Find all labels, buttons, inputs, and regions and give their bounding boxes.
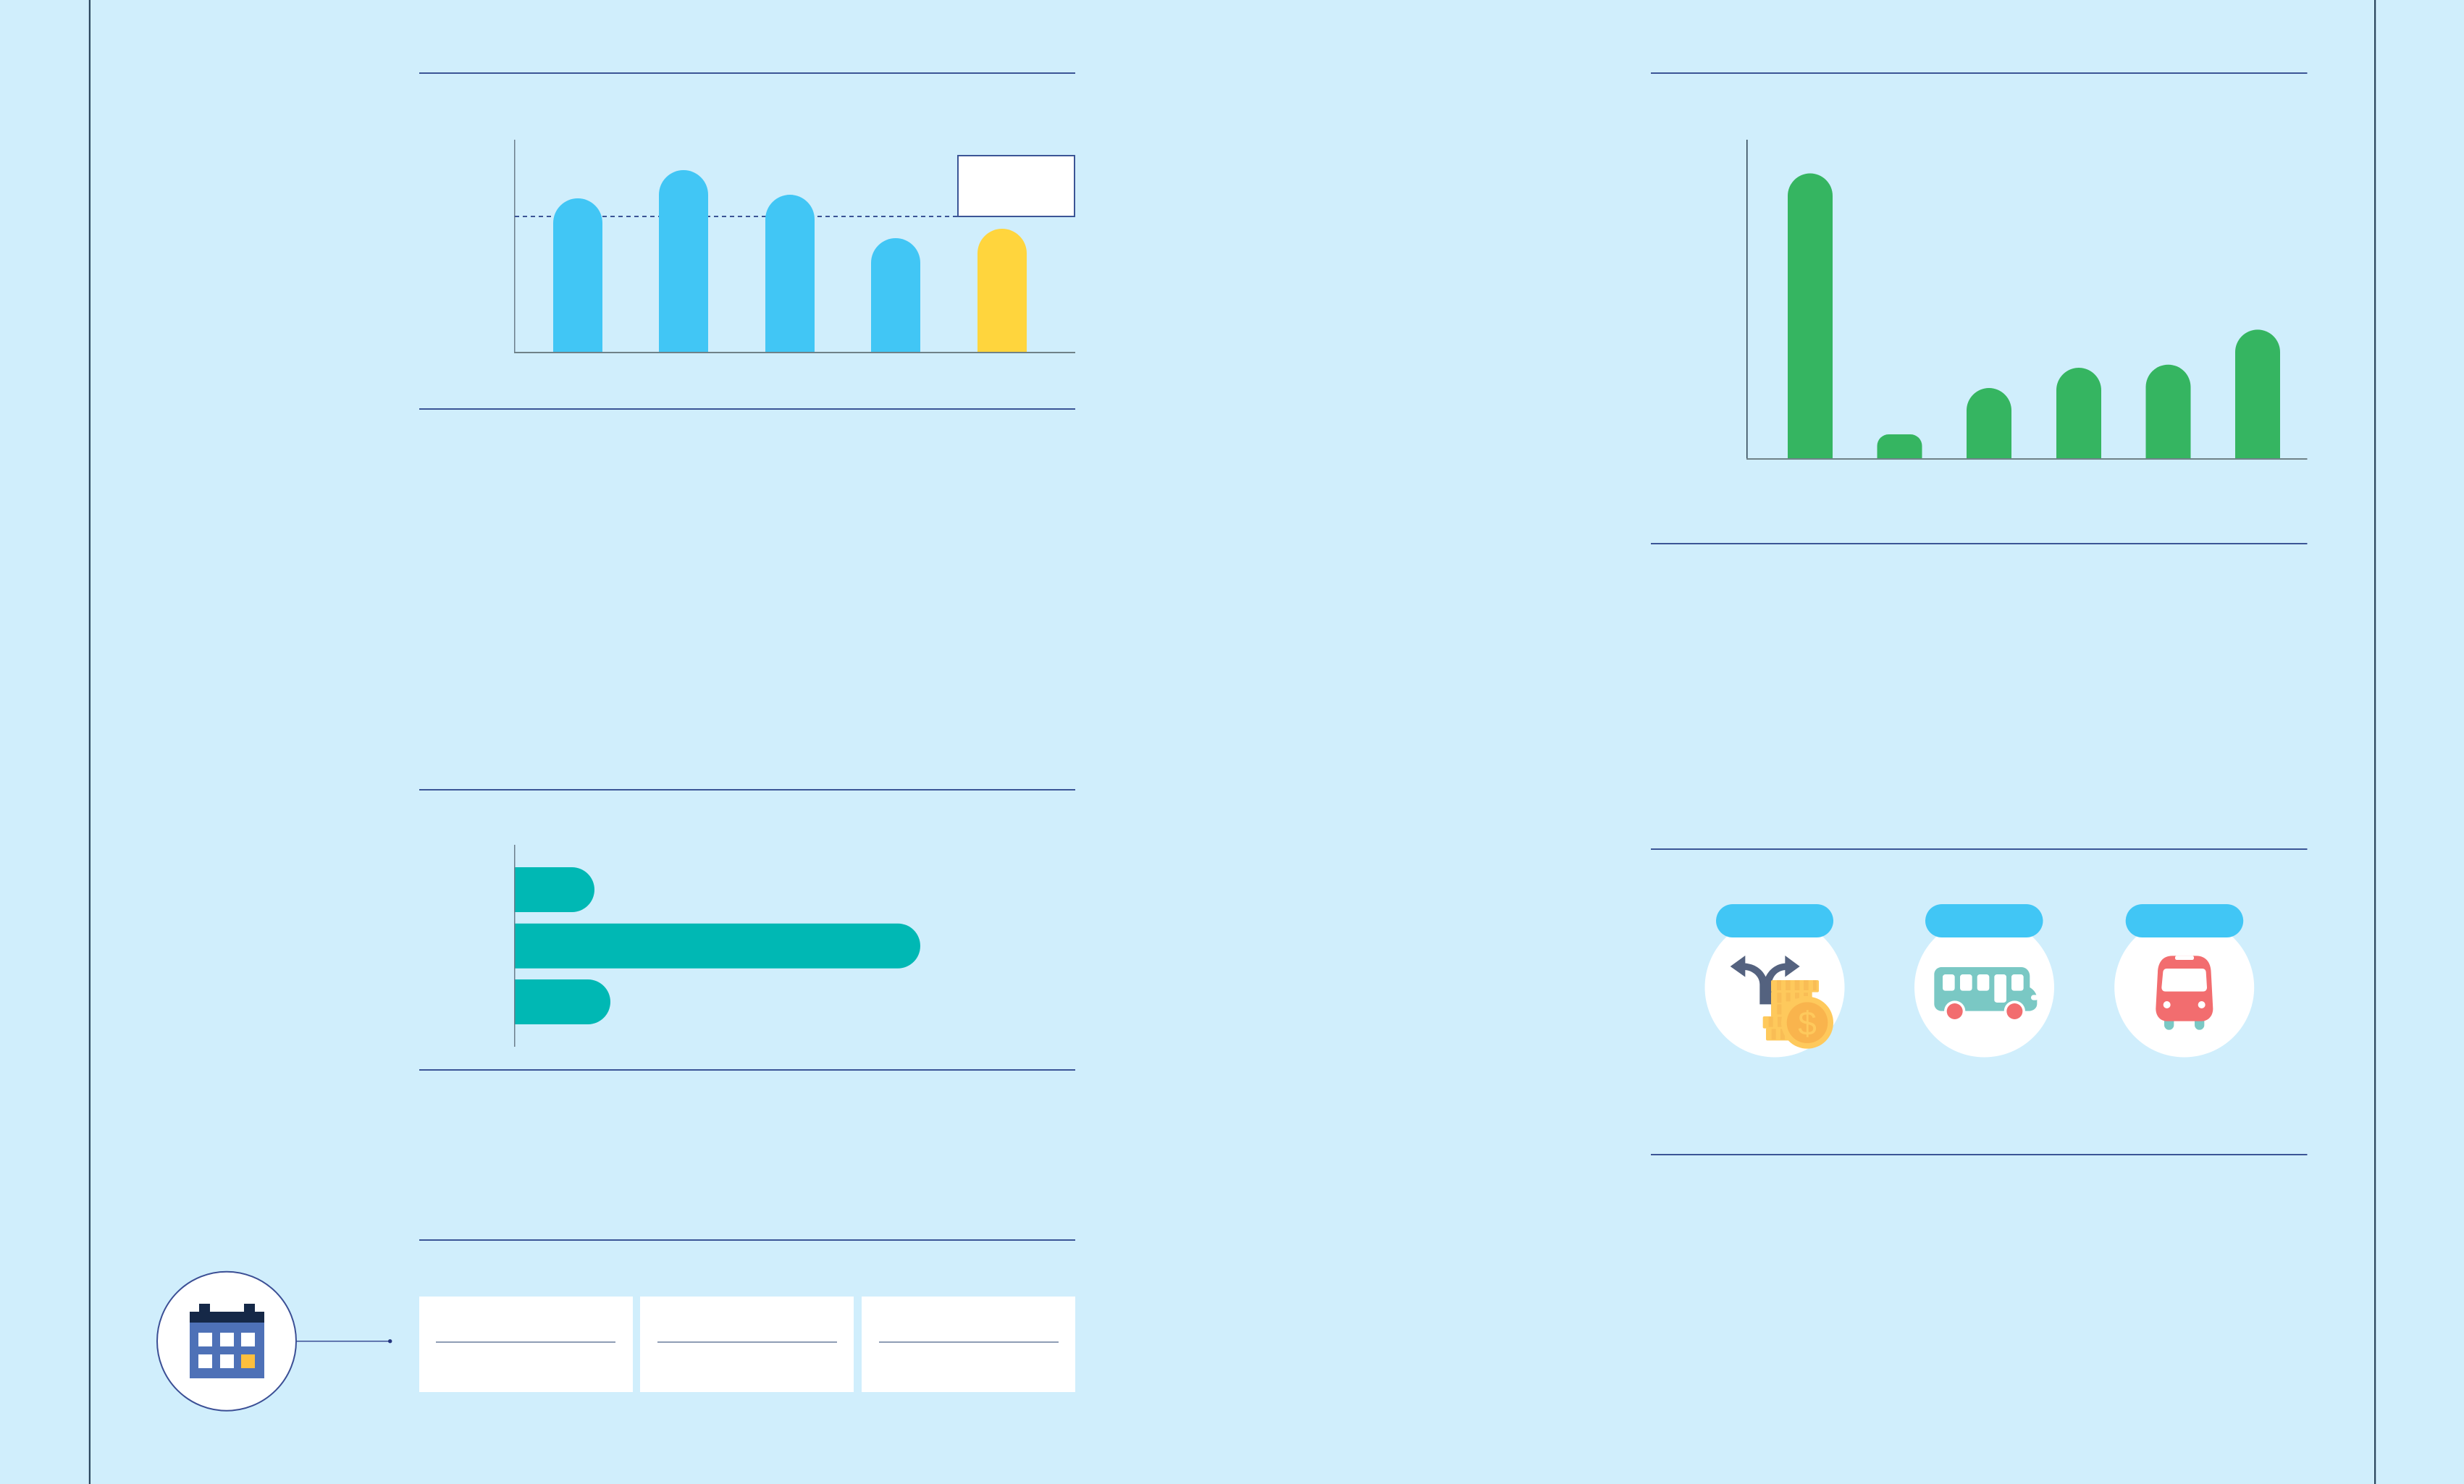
bar 3 <box>765 195 815 353</box>
icon: front-view bus <box>2114 904 2254 1057</box>
card 3 <box>862 1297 1075 1392</box>
chart: vertical bar chart with average line <box>514 140 1075 353</box>
bar 1 <box>553 198 602 353</box>
horizontal bar 2 <box>515 924 920 969</box>
card 2 <box>640 1297 854 1392</box>
icon: side-view bus <box>1914 904 2054 1057</box>
chart: green vertical bar chart <box>1746 140 2307 460</box>
callout box <box>958 156 1075 216</box>
green bar 2 <box>1877 434 1922 459</box>
green bar 3 <box>1967 388 2011 459</box>
bar 5 highlighted <box>977 229 1027 353</box>
icon: calendar in circle <box>157 1272 296 1411</box>
horizontal bar 1 <box>515 867 594 912</box>
horizontal bar 3 <box>515 979 610 1024</box>
bar 4 <box>871 238 920 353</box>
icon: branching arrows and coins: $ <box>1798 1004 1817 1042</box>
icon: branching arrows and coins <box>1704 904 1845 1057</box>
card 1 <box>419 1297 633 1392</box>
green bar 5 <box>2146 365 2191 459</box>
green bar 1 <box>1788 174 1833 459</box>
connector line <box>296 1339 392 1343</box>
green bar 6 <box>2235 329 2280 459</box>
chart: horizontal bar chart <box>514 845 920 1047</box>
green bar 4 <box>2056 368 2101 459</box>
bar 2 <box>659 170 708 353</box>
